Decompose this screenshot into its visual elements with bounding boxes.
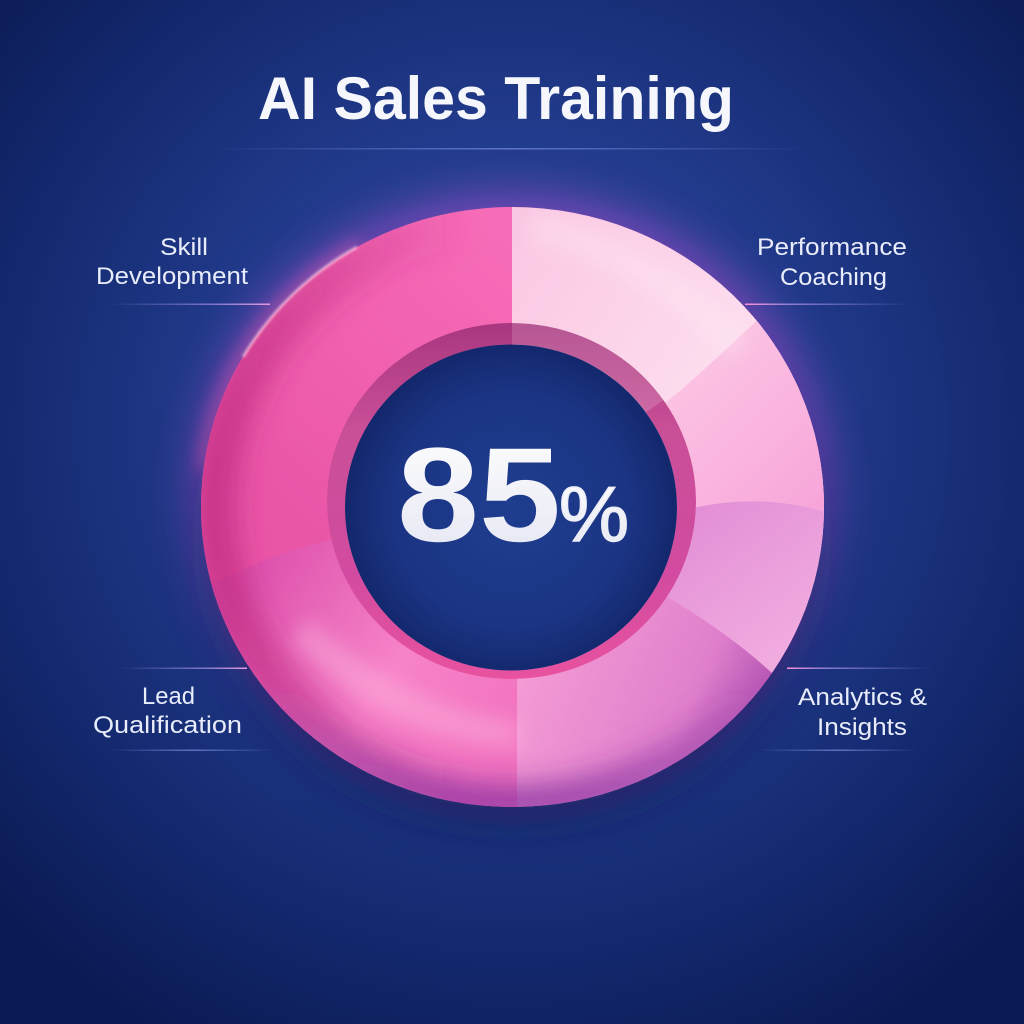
label: skill development: Development [96, 263, 248, 290]
inner lip [327, 323, 696, 679]
label: skill development: Skill [160, 234, 208, 261]
label: lead qualification: Qualification [93, 712, 242, 739]
donut chart [180, 190, 840, 830]
segment: skill development [201, 207, 512, 620]
label: analytics and insights [758, 668, 932, 751]
center value: % [559, 470, 629, 558]
ring segments [201, 207, 824, 807]
connector: lead qualification top [120, 668, 247, 669]
connector: analytics top [787, 668, 932, 669]
center value: 85 [397, 421, 561, 570]
center hole [345, 344, 677, 670]
ring rim highlight [243, 247, 357, 357]
ring glow [194, 195, 830, 825]
connector: lead qualification bottom [110, 750, 275, 751]
title divider [210, 148, 810, 150]
label: analytics and insights: Analytics & [798, 684, 927, 711]
segment: lead qualification [212, 540, 517, 807]
segment: performance coaching lower [649, 321, 824, 511]
connector: skill development [110, 304, 270, 305]
segment: analytics and insights [655, 501, 824, 673]
label: performance coaching [745, 234, 910, 305]
connector: performance coaching [745, 304, 910, 305]
tube shading [201, 221, 744, 807]
label: performance coaching: Performance [757, 234, 907, 261]
center value [397, 421, 629, 570]
label: skill development [96, 234, 270, 305]
label: lead qualification: Lead [142, 683, 195, 710]
label: lead qualification [93, 668, 275, 751]
segment: performance coaching [512, 190, 840, 620]
label: performance coaching: Coaching [780, 264, 887, 291]
connector: analytics bottom [758, 750, 918, 751]
title: AI Sales Training [258, 65, 734, 132]
segment: analytics and insights lower [517, 590, 772, 807]
label: analytics and insights: Insights [817, 714, 907, 741]
